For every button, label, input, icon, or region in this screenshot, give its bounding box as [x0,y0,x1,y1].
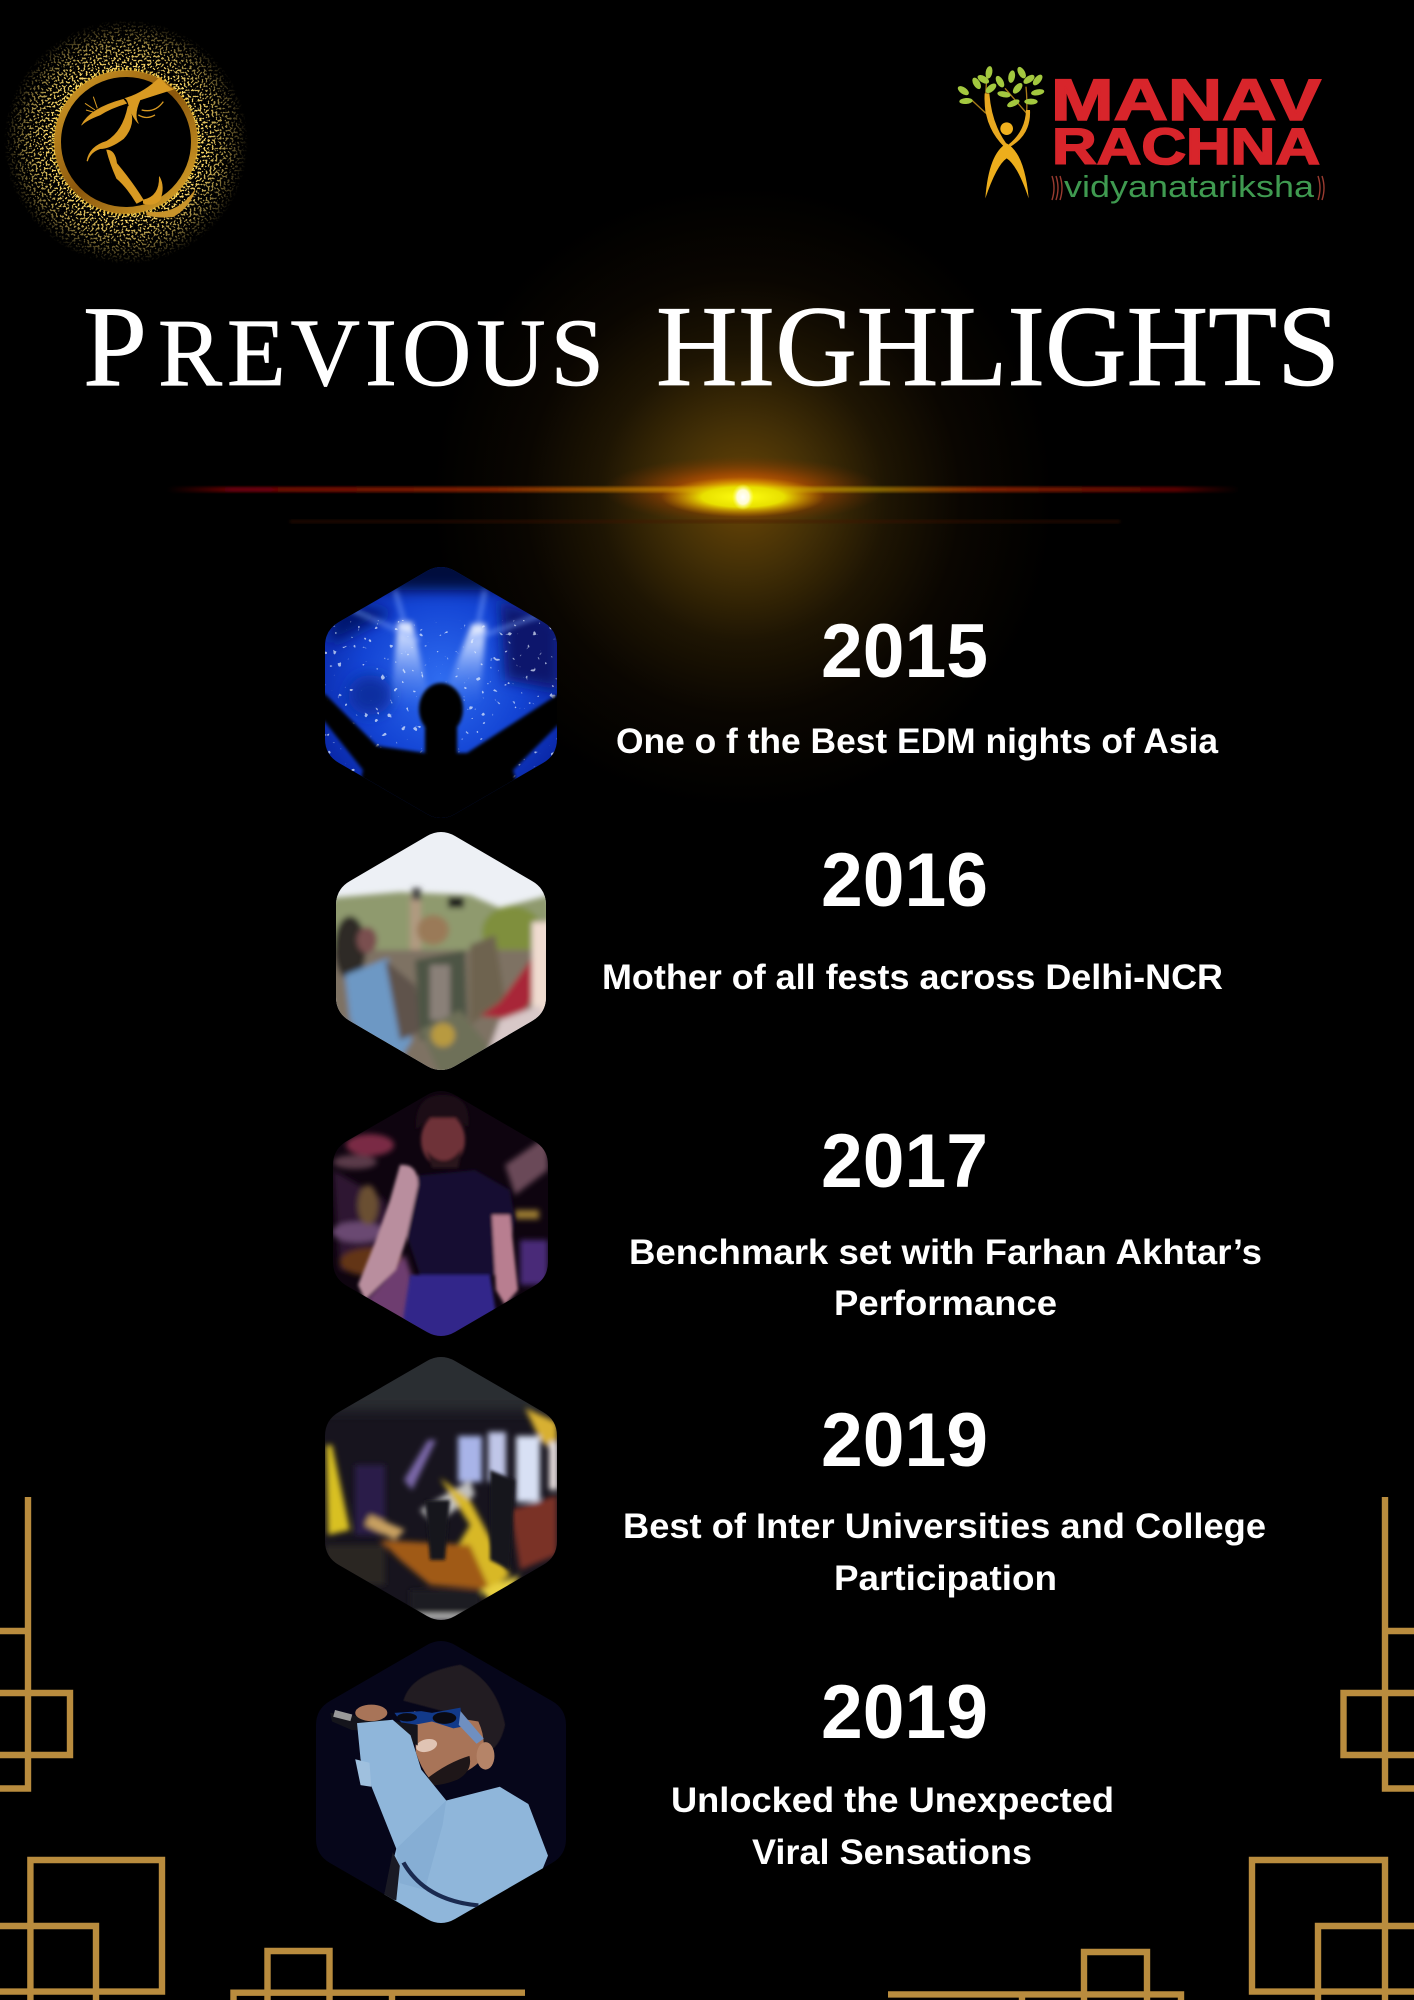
tree and figure icon [956,66,1045,198]
lens flare glow [167,187,1240,812]
year: 2017 [821,1119,988,1204]
logo: gold ring emblem [0,16,252,268]
denim jacket [357,1720,548,1924]
photo: EDM crowd [325,567,557,818]
item 2016 [330,825,1223,1080]
caption: Best of Inter Universities and College [623,1507,1266,1546]
caption: One o f the Best EDM nights of Asia [616,722,1219,761]
year: 2019 [821,1670,988,1755]
item 2017: Performance [834,1284,1057,1323]
microphone [330,1713,418,1746]
title [83,283,1340,410]
year: 2016 [821,838,988,923]
item 2015 [325,567,1218,818]
photo: band on stage [325,1357,557,1620]
year: 2019 [821,1398,988,1483]
item 2019 band [320,1340,1266,1630]
photo: singer with microphone [316,1641,566,1923]
caption: Mother of all fests across Delhi-NCR [602,958,1223,997]
item 2019 artist [310,1630,1114,1935]
caption: Unlocked the Unexpected [671,1781,1114,1820]
dancer figure [82,77,195,217]
title: REVIOUS [158,299,604,406]
item 2019 band: Participation [834,1559,1057,1598]
photo: festival crowd [336,832,546,1070]
tagline: vidyanatariksha [1064,169,1315,204]
photo: Farhan Akhtar performance [333,1091,548,1336]
logo: Manav Rachna: RACHNA [1052,118,1320,175]
wordmark: MANAV [1051,68,1321,133]
title: HIGHLIGHTS [656,283,1340,410]
item 2019 artist: Viral Sensations [752,1833,1032,1872]
gold ring [58,74,194,210]
hair and head [403,1665,505,1752]
gold dust particles [0,16,252,268]
item 2017 [328,1083,1262,1345]
logo: Manav Rachna [956,66,1324,204]
year: 2015 [821,609,988,694]
title: P [83,283,147,410]
sunglasses [394,1708,462,1728]
caption: Benchmark set with Farhan Akhtar’s [629,1233,1262,1272]
